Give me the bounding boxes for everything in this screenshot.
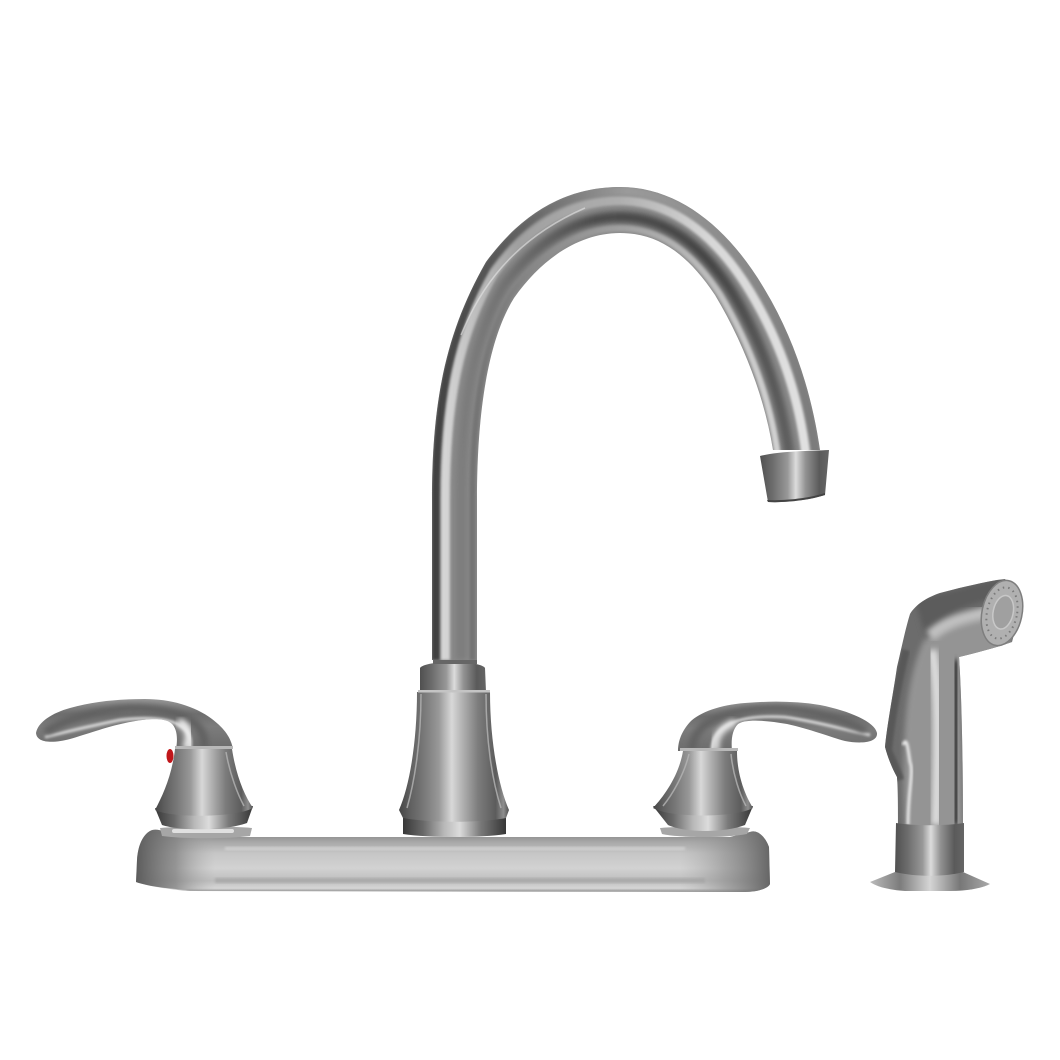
right handle: [653, 702, 877, 837]
sprayer collar: [895, 823, 964, 876]
sprayer nozzle face: [976, 577, 1028, 649]
side sprayer: [870, 577, 1028, 891]
deck plate: [136, 830, 770, 892]
center base: [399, 660, 509, 837]
sprayer flange: [870, 872, 990, 891]
spout: [432, 187, 820, 660]
spout nozzle: [760, 450, 829, 502]
product photo: kitchen faucet with side sprayer: [36, 187, 1024, 892]
icon: red hot indicator: [166, 749, 174, 763]
left handle: [36, 699, 253, 838]
sprayer body: [885, 579, 1023, 828]
